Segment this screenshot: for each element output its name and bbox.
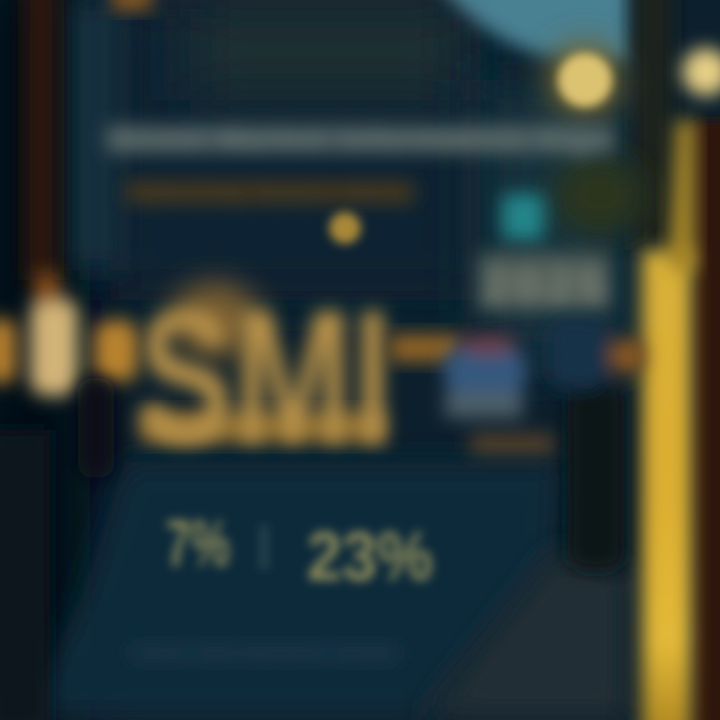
caption: faint bottom line: Visit the market today [135, 643, 395, 663]
heading: blurred top line: Street Market Information Sign [110, 122, 610, 157]
right pedestrian [548, 320, 646, 570]
road surface [420, 550, 628, 720]
sky [436, 0, 630, 62]
dark pole [634, 0, 672, 250]
stat text: blurred percentages: 7% [166, 506, 230, 580]
left warm lights [0, 272, 138, 396]
icon: teal sign [502, 194, 544, 240]
main title: large gold letters: SMI [138, 271, 392, 483]
street lamp: left [547, 42, 623, 118]
street lamp: right [682, 48, 720, 96]
icon: amber dot [329, 212, 361, 244]
left pedestrians [0, 378, 114, 720]
side sign: pale text: 2025 [483, 260, 605, 312]
golden pillar [642, 120, 720, 720]
subheading: blurred amber line: Opening hours daily [130, 180, 411, 207]
panel: lower navy sign [20, 462, 560, 720]
colourful stall [443, 335, 555, 454]
stat text: blurred percentages: 23% [307, 517, 433, 595]
stat text: blurred percentages [166, 506, 433, 595]
foliage [554, 155, 646, 235]
